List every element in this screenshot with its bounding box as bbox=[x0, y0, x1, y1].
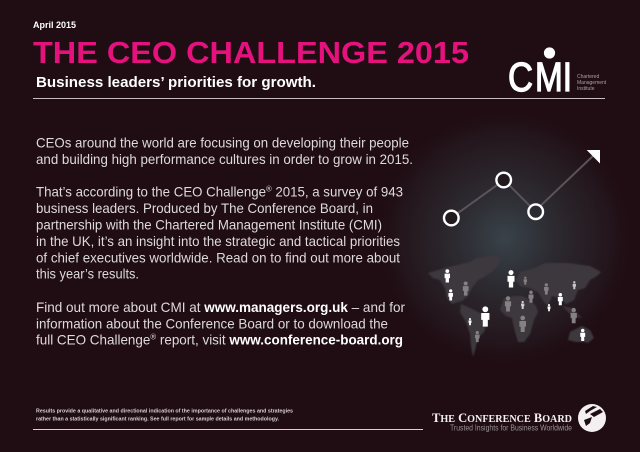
CMI logo: Institute bbox=[577, 86, 595, 92]
title: THE CEO CHALLENGE 2015 bbox=[33, 36, 469, 70]
body text: links paragraph: information about the Conference Board or to download the bbox=[36, 316, 388, 332]
The Conference Board logo: Trusted Insights for Business Worldwide bbox=[450, 422, 572, 432]
body text: intro paragraph: and building high performance cultures in order to grow in 2015. bbox=[36, 152, 413, 167]
body text: links paragraph: www.conference-board.org bbox=[228, 332, 403, 348]
body text: survey paragraph: 2015, a survey of 943 bbox=[272, 184, 403, 200]
body text: intro paragraph bbox=[36, 136, 413, 167]
body text: survey paragraph: this year’s results. bbox=[36, 266, 139, 282]
body text: intro paragraph: CEOs around the world are focusing on developing their people bbox=[36, 136, 409, 150]
people icons on map bbox=[445, 269, 585, 342]
footer rule bbox=[33, 429, 423, 430]
world map bbox=[428, 255, 601, 357]
footnote bbox=[36, 408, 293, 422]
CMI logo: Management bbox=[577, 80, 607, 86]
date: April 2015 bbox=[33, 20, 77, 31]
The Conference Board logo bbox=[432, 404, 606, 432]
body text: links paragraph: report, visit bbox=[156, 332, 229, 348]
CMI logo: C bbox=[508, 54, 533, 100]
body text: links paragraph: ® bbox=[150, 332, 156, 342]
body text: survey paragraph bbox=[36, 184, 403, 282]
CMI logo: MI bbox=[535, 54, 572, 100]
body text: survey paragraph: in the UK, it’s an insight into the strategic and tactical priorities bbox=[36, 234, 400, 249]
subtitle: Business leaders’ priorities for growth. bbox=[36, 74, 316, 91]
footnote: rather than a statistically significant ranking. See full report for sample details and methodology. bbox=[36, 416, 279, 422]
footnote: Results provide a qualitative and directional indication of the importance of challenges and strategies bbox=[36, 408, 293, 414]
header rule bbox=[33, 98, 605, 99]
body text: survey paragraph: partnership with the Chartered Management Institute (CMI) bbox=[36, 218, 382, 232]
body text: survey paragraph: of chief executives worldwide. Read on to find out more about bbox=[36, 250, 400, 266]
CMI logo bbox=[508, 47, 607, 100]
body text: links paragraph: full CEO Challenge bbox=[36, 332, 153, 348]
body text: survey paragraph: business leaders. Produced by The Conference Board, in bbox=[36, 201, 373, 216]
body text: survey paragraph: That’s according to the CEO Challenge bbox=[36, 184, 275, 200]
CMI logo: Chartered bbox=[577, 74, 599, 80]
line chart with rising arrow bbox=[444, 150, 600, 225]
The Conference Board logo: THE CONFERENCE BOARD bbox=[432, 410, 572, 425]
body text: links paragraph: Find out more about CMI at www.managers.org.uk – and for bbox=[36, 300, 405, 315]
body text: survey paragraph: ® bbox=[266, 184, 272, 194]
body text: links paragraph bbox=[36, 300, 405, 348]
